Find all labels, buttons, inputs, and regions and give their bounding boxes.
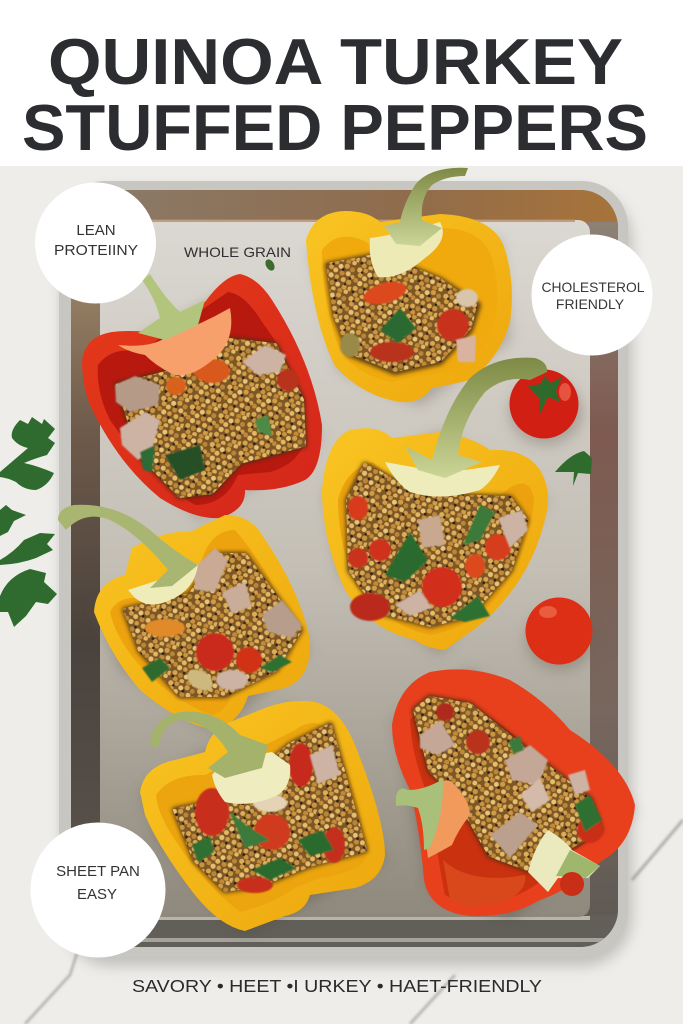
pepper stem [58,505,198,588]
pepper cavity [110,530,296,715]
pepper: yellow top [306,168,512,405]
badge: cholesterol friendly: FRIENDLY [556,296,625,312]
left stem and flesh [420,780,470,858]
tray right wall [588,222,619,922]
pepper stem [138,274,205,340]
tagline: SAVORY • HEET •I URKEY • HAET-FRIENDLY [132,976,542,996]
title band [0,0,683,166]
pepper stem [384,168,468,246]
filling items [348,496,528,622]
parsley sprigs [0,417,57,627]
pepper body [322,428,548,650]
filling items [340,278,478,362]
title line one: QUINOA TURKEY [48,25,623,98]
badge: cholesterol friendly: CHOLESTEROL [542,279,645,295]
pepper cavity [338,462,534,635]
badge: lean protein [35,182,156,304]
pepper body [140,701,385,931]
title line two: STUFFED PEPPERS [22,91,648,164]
pepper body [392,669,635,916]
filling items [142,548,302,695]
pepper flesh [212,752,290,804]
badge: lean protein: PROTEIINY [54,242,138,259]
quinoa filling [175,725,365,890]
cherry tomato lower right [526,598,594,670]
badge: lean protein: LEAN [76,222,116,239]
filling shadow [175,725,365,890]
tray bottom wall [580,916,618,947]
filling shadow [415,698,600,870]
quinoa filling [328,255,475,370]
badge: sheet pan easy [30,822,166,958]
tomato calyx [528,376,562,414]
badge: sheet pan easy: SHEET PAN [56,863,140,880]
tray top wall [71,190,618,226]
right stem and flesh [528,830,600,892]
pepper lower cavity [443,860,525,907]
filling shadow [118,340,304,496]
quinoa filling [415,698,600,870]
tray rim [59,181,628,957]
pepper: yellow bottom [140,701,385,935]
pepper body [82,274,322,518]
pepper: yellow centre [322,358,548,655]
filling items [420,703,603,858]
pepper: red-orange bottom right [392,669,635,920]
pepper: yellow left [58,505,310,735]
filling items [192,743,345,893]
filling items [115,345,299,480]
pepper flesh [118,308,231,375]
tray left wall [71,298,100,828]
tray inner walls [71,190,619,947]
pepper body [306,211,512,402]
badge: cholesterol friendly [532,234,652,356]
pepper flesh [128,564,198,605]
pepper cavity [322,228,497,382]
cherry tomato top right [510,370,582,444]
quinoa filling [125,555,300,695]
sheet pan tray [59,181,632,966]
pepper stem [150,711,268,778]
icon: herb fleck [264,258,276,272]
label: whole grain: WHOLE GRAIN [184,244,291,260]
pepper flesh [385,458,500,497]
pepper body [94,515,310,730]
pepper cavity [156,723,366,912]
badge: sheet pan easy: EASY [77,886,117,903]
tray floor [100,220,590,917]
basil leaf right [555,451,592,486]
pepper cavity [410,699,600,902]
quinoa filling [118,340,304,496]
filling shadow [328,255,478,372]
filling shadow [348,465,526,625]
pepper flesh [370,222,443,277]
filling shadow [125,555,300,695]
pepper stem [405,358,547,478]
quinoa filling [348,465,526,625]
pepper cavity [98,292,306,505]
pepper: red top left [82,274,322,520]
